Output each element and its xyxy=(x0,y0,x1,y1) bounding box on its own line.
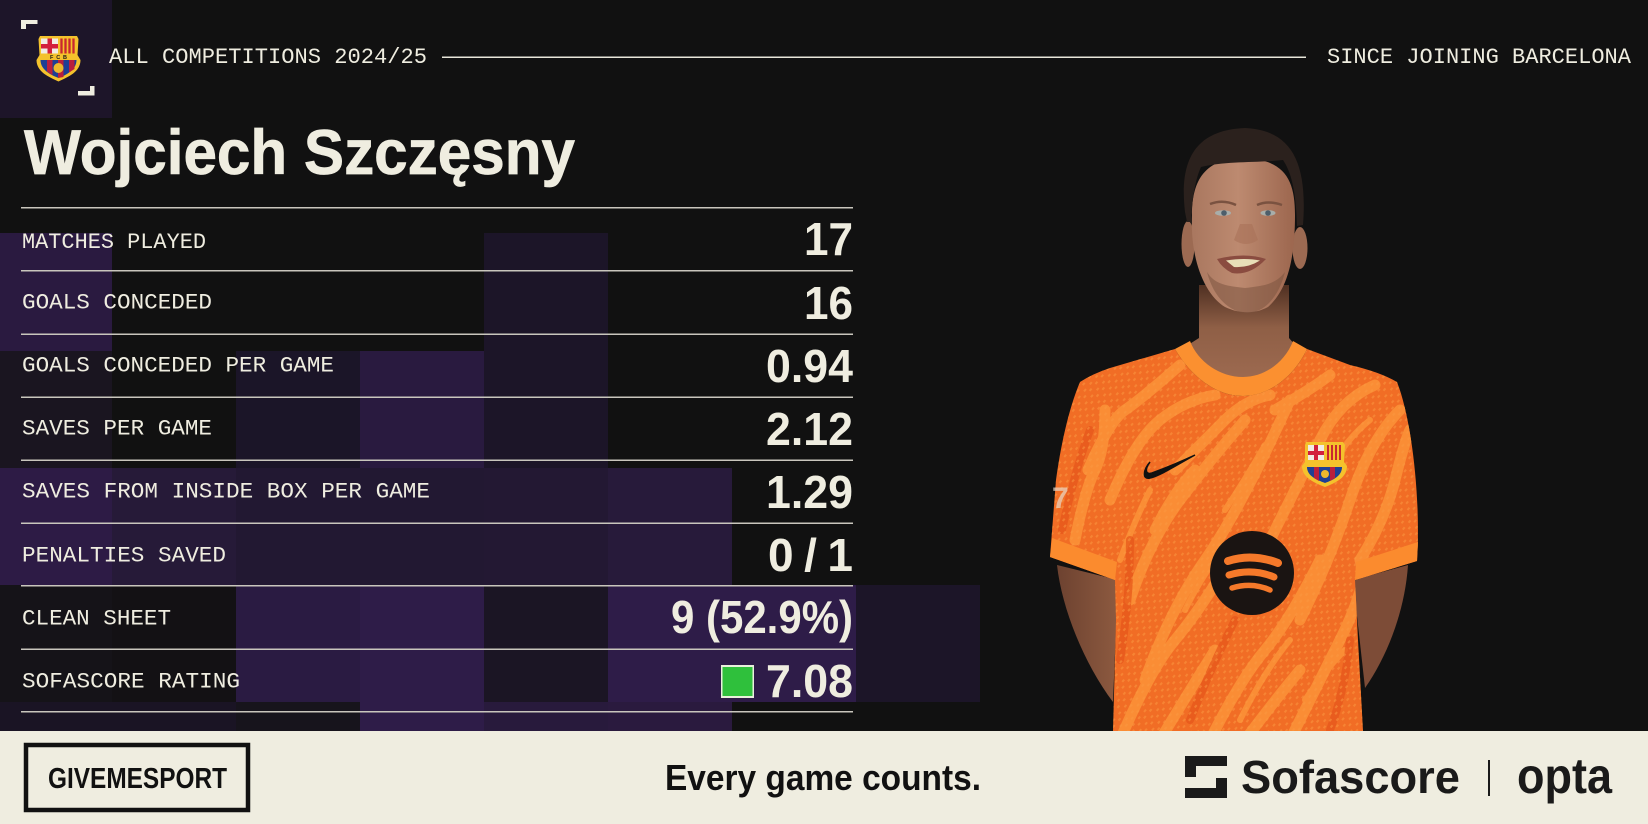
row: saves from inside box per game: SAVES FROM INSIDE BOX PER GAME xyxy=(22,478,430,504)
row: clean sheet: CLEAN SHEET xyxy=(22,606,171,632)
stat table xyxy=(21,207,853,712)
player illustration xyxy=(1050,128,1420,740)
header rule xyxy=(442,56,1306,58)
icon: Nike swoosh xyxy=(1144,455,1195,478)
header: competition label: ALL COMPETITIONS 2024/25 xyxy=(109,44,427,70)
nose xyxy=(1234,224,1258,244)
left sleeve cuff xyxy=(1050,538,1117,580)
row: sofascore rating: 7.08 xyxy=(766,655,853,707)
GiveMeSport logo: GIVEMESPORT xyxy=(48,763,227,795)
footer band xyxy=(0,731,1648,824)
sleeve number: 7 xyxy=(1052,482,1069,515)
eyes and brows xyxy=(1210,202,1282,216)
shirt xyxy=(1050,341,1420,740)
row: sofascore rating: SOFASCORE RATING xyxy=(22,668,240,694)
icon: Spotify logo xyxy=(1210,531,1294,615)
tagline: Every game counts. xyxy=(665,757,981,798)
icon: Sofascore mark xyxy=(1185,756,1227,798)
mouth xyxy=(1217,256,1266,273)
icon: Barcelona crest: FCB xyxy=(50,55,67,61)
row: clean sheet: 9 (52.9%) xyxy=(671,591,853,643)
right arm xyxy=(1353,565,1408,688)
collar xyxy=(1175,341,1307,396)
row: saves from inside box per game xyxy=(22,466,853,518)
neck xyxy=(1188,285,1295,380)
row: goals conceded per game xyxy=(22,340,853,392)
row: goals conceded: GOALS CONCEDED xyxy=(22,290,212,316)
ears xyxy=(1182,221,1308,269)
stubble xyxy=(1207,272,1285,313)
logo bracket frame xyxy=(21,20,94,96)
face xyxy=(1192,158,1295,312)
row: goals conceded per game: GOALS CONCEDED PER GAME xyxy=(22,352,334,378)
row: saves per game xyxy=(22,403,853,455)
divider xyxy=(1488,760,1490,796)
shirt camouflage pattern xyxy=(1050,349,1420,740)
left arm xyxy=(1057,565,1118,702)
GiveMeSport logo xyxy=(26,745,248,810)
row: sofascore rating xyxy=(22,655,853,707)
row: matches played: MATCHES PLAYED xyxy=(22,229,206,255)
header: since joining label: SINCE JOINING BARCELONA xyxy=(1327,44,1631,70)
title: player name: Wojciech Szczęsny xyxy=(24,118,575,188)
row: goals conceded per game: 0.94 xyxy=(766,340,853,392)
background pattern: purple blocks xyxy=(0,0,980,731)
row: saves from inside box per game: 1.29 xyxy=(766,466,853,518)
row: penalties saved xyxy=(22,529,853,581)
icon: Barcelona crest xyxy=(36,36,80,82)
row: penalties saved: PENALTIES SAVED xyxy=(22,542,226,568)
row: matches played: 17 xyxy=(804,213,853,265)
row: clean sheet xyxy=(22,591,853,643)
row: saves per game: SAVES PER GAME xyxy=(22,416,212,442)
row: goals conceded xyxy=(22,277,853,329)
Sofascore logo: Sofascore xyxy=(1241,751,1460,803)
hair xyxy=(1184,128,1304,226)
row: matches played xyxy=(22,213,853,265)
right sleeve cuff xyxy=(1355,542,1418,580)
row: penalties saved: 0/1 xyxy=(768,529,853,581)
Opta logo: opta xyxy=(1517,748,1613,804)
row: saves per game: 2.12 xyxy=(766,403,853,455)
icon: shirt crest xyxy=(1302,442,1347,487)
row: goals conceded: 16 xyxy=(804,277,853,329)
